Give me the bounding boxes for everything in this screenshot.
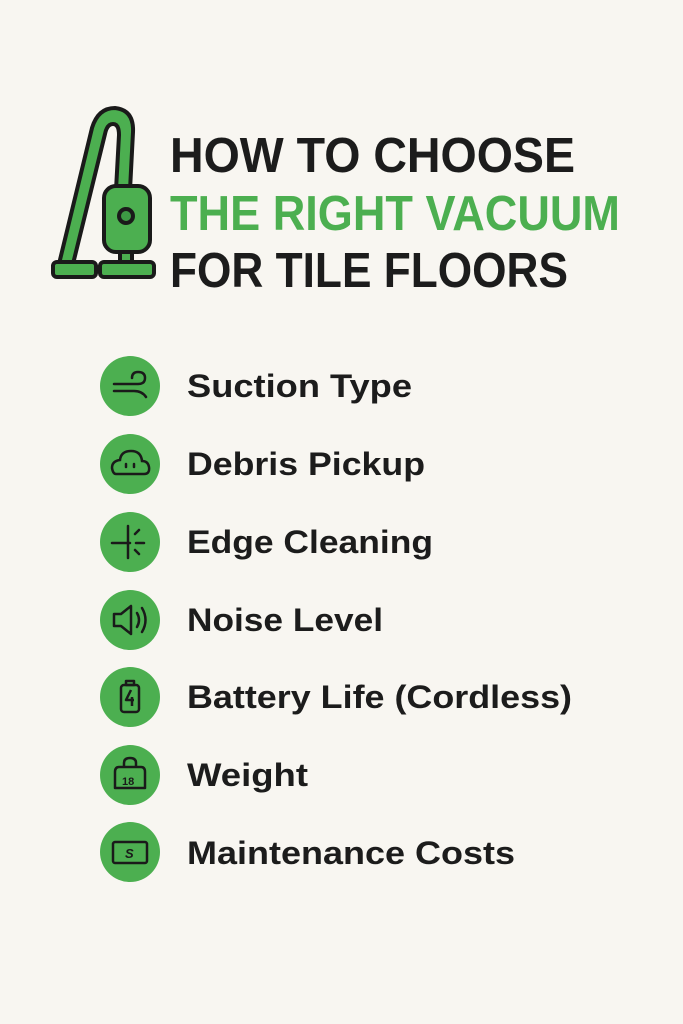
- item: debris pickup: Debris Pickup: [187, 446, 425, 482]
- item: weight: 18: [122, 776, 134, 788]
- list: factors: [100, 356, 572, 882]
- item: debris pickup: [100, 434, 425, 494]
- title: [170, 129, 620, 298]
- item: suction type: [100, 356, 412, 416]
- item: suction type: Suction Type: [187, 368, 412, 404]
- item: noise level: Noise Level: [187, 602, 383, 638]
- item: battery life: [100, 667, 572, 727]
- title: HOW TO CHOOSE: [170, 129, 575, 183]
- item: weight: Weight: [187, 757, 308, 793]
- item: maintenance costs: [100, 822, 515, 882]
- item: weight: [100, 745, 308, 805]
- title: THE RIGHT VACUUM: [170, 187, 620, 241]
- item: noise level: [100, 590, 383, 650]
- title: FOR TILE FLOORS: [170, 244, 568, 298]
- item: edge cleaning: Edge Cleaning: [187, 524, 433, 560]
- item: edge cleaning: [100, 512, 433, 572]
- item: battery life: Battery Life (Cordless): [187, 679, 572, 715]
- item: maintenance costs: Maintenance Costs: [187, 835, 515, 871]
- icon: vacuum cleaner: [53, 108, 154, 277]
- item: maintenance costs: S: [125, 846, 134, 861]
